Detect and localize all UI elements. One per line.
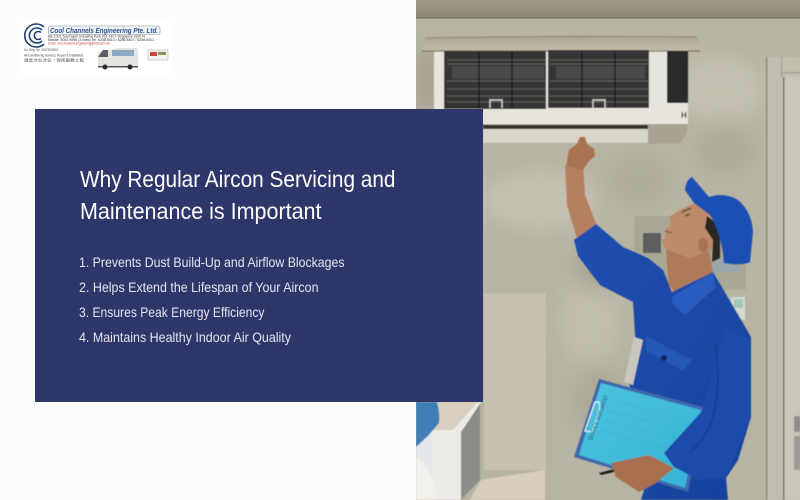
recessed wall panel — [470, 293, 546, 500]
company contact details: Blk 1002 Toa Payoh Industrial Park #01-1407 Singapore 319074 — [48, 34, 145, 38]
black control panel — [667, 51, 688, 103]
heading: Maintenance is Important — [80, 198, 322, 224]
hand holding clipboard — [611, 455, 674, 492]
neck — [666, 250, 714, 292]
blue cap — [685, 177, 753, 264]
list of reasons: 2. Helps Extend the Lifespan of Your Aircon — [79, 279, 318, 295]
ear — [698, 238, 708, 252]
raised top cover — [422, 36, 700, 51]
photo: technician servicing an air conditioner — [412, 0, 800, 500]
heading — [80, 166, 396, 224]
technician — [565, 137, 753, 500]
icon: concentric C emblem — [25, 24, 44, 47]
company name badge: Cool Channels Engineering Pte. Ltd. — [50, 26, 158, 35]
electrical box and sticker — [634, 216, 746, 320]
company contact details: Mobile: 9003 9096 (3 lines) Tel: 6258 8410 / 6258 8407 / 6258 8401 — [48, 38, 154, 42]
left filter — [444, 51, 546, 109]
document heading: SERVICE DOCUMENT — [588, 394, 610, 442]
grey right corner — [648, 124, 688, 144]
list of reasons: 3. Ensures Peak Energy Efficiency — [79, 304, 264, 320]
company contact details: Email: cool.channels.engineering@hotmail.com — [48, 42, 110, 46]
pocket button — [661, 355, 667, 361]
hand on louver — [566, 137, 595, 170]
air vent — [483, 125, 649, 130]
door frame — [766, 57, 800, 500]
water bottle — [416, 402, 439, 447]
icon: service van — [98, 48, 138, 70]
company services text: Co. Reg. No. 201732039G — [24, 48, 58, 52]
heading: Why Regular Aircon Servicing and — [80, 166, 396, 192]
yellow undershirt — [668, 285, 674, 292]
company services text — [24, 48, 85, 62]
lower louver — [483, 129, 648, 143]
clipboard clip — [585, 402, 600, 432]
ID badge — [624, 337, 643, 385]
pen — [598, 468, 615, 476]
collar — [672, 272, 715, 315]
raised arm — [565, 165, 597, 242]
chest pocket — [646, 336, 692, 371]
certification badge — [148, 50, 168, 60]
company services text: 專業冷氣冷氣，保修服務工程 — [24, 58, 85, 62]
face — [662, 203, 718, 258]
ceiling band — [416, 0, 800, 18]
right filter — [548, 50, 649, 108]
eye and brow — [682, 208, 691, 216]
company services text: Air-conditioning services, Repair & Installation. — [24, 54, 84, 58]
unit brand mark: H — [681, 111, 687, 120]
sleeve fold — [690, 345, 718, 452]
forearm sleeve — [664, 330, 751, 480]
white jug — [416, 457, 436, 500]
list of reasons: 4. Maintains Healthy Indoor Air Quality — [79, 329, 291, 345]
uniform — [574, 224, 751, 500]
white body — [434, 50, 688, 124]
clipboard — [574, 379, 703, 492]
hair — [705, 216, 720, 262]
panel: navy text card — [35, 109, 483, 402]
company logo — [20, 20, 172, 74]
microwave and water dispenser — [416, 402, 481, 500]
list of reasons — [79, 254, 344, 345]
company contact details — [48, 34, 154, 46]
list of reasons: 1. Prevents Dust Build-Up and Airflow Blockages — [79, 254, 344, 270]
mouth — [665, 231, 672, 233]
air conditioner unit — [422, 36, 700, 144]
concrete wall — [412, 0, 800, 500]
